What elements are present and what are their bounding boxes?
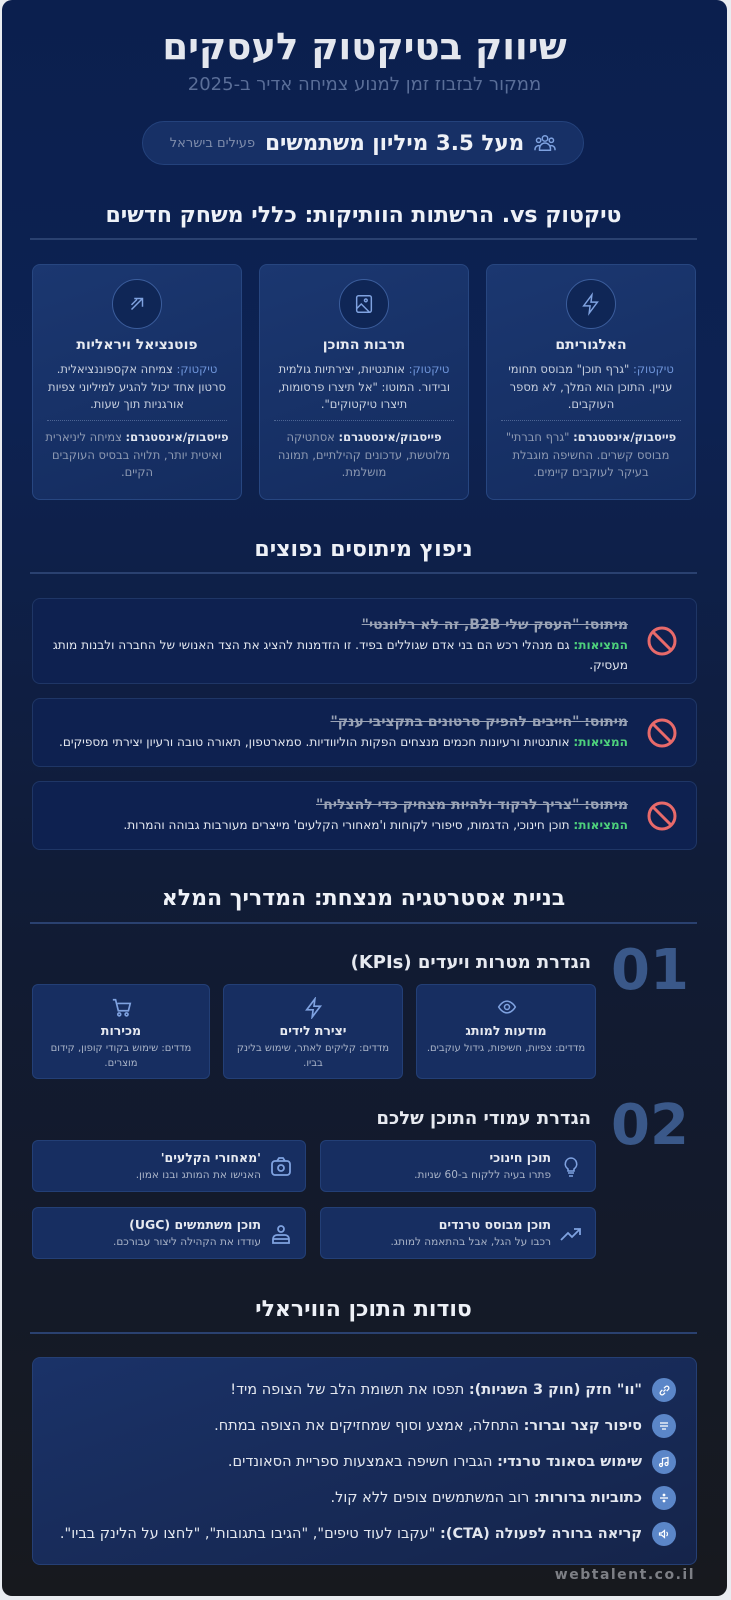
panel: algorithm xyxy=(486,264,696,500)
item: story xyxy=(214,1414,676,1438)
icon: no xyxy=(648,802,676,830)
panel: algorithm: טיקטוק: "גרף תוכן" מבוסס תחומי עניין. התוכן הוא המלך, לא מספר העוקבים. xyxy=(508,362,674,411)
item: story: סיפור קצר וברור: התחלה, אמצע וסוף שמחזיקים את הצופה במתח. xyxy=(214,1418,642,1434)
kpi: sales xyxy=(32,984,210,1079)
myth 3 xyxy=(32,781,697,850)
icon: no xyxy=(648,718,676,748)
item: sound xyxy=(228,1450,676,1474)
item: hook: "וו" חזק (חוק 3 השניות): תפסו את תשומת הלב של הצופה מיד! xyxy=(230,1382,642,1398)
pillar: trends: רכבו על הגל, אבל בהתאמה למותג. xyxy=(390,1236,551,1248)
panel: content culture xyxy=(259,264,469,500)
step 01 number: 01 xyxy=(611,938,689,1003)
title: שיווק בטיקטוק לעסקים xyxy=(162,25,567,68)
kpi: leads: מדדים: קליקים לאתר, שימוש בלינק בביו. xyxy=(237,1043,389,1069)
panel: content culture: טיקטוק: אותנטיות, יצירתיות גולמית ובידור. המוטו: "אל תיצרו פרסומות, תיצרו טיקטוקים". xyxy=(278,362,450,411)
step 02 heading: הגדרת עמודי התוכן שלכם xyxy=(377,1108,591,1129)
panel: viral potential xyxy=(32,264,242,500)
pillar: trends xyxy=(320,1207,596,1259)
pillar: UGC xyxy=(32,1207,306,1259)
icon: image xyxy=(339,279,389,329)
panel: content culture: תרבות התוכן xyxy=(323,337,405,353)
panel: algorithm: פייסבוק/אינסטגרם: "גרף חברתי" מבוסס קשרים. החשיפה מוגבלת בעיקר לעוקבים קיימים. xyxy=(506,430,676,479)
item: captions: כתוביות ברורות: רוב המשתמשים צופים ללא קול. xyxy=(330,1490,642,1506)
myth 1 xyxy=(32,598,697,684)
icon: bolt xyxy=(566,279,616,329)
panel: viral potential: טיקטוק: צמיחה אקספוננציאלית. סרטון אחד יכול להגיע למיליוני צפיות אורגניות תוך שעות. xyxy=(48,362,226,411)
pillar: behind the scenes: האנישו את המותג ובנו אמון. xyxy=(136,1169,261,1181)
heading: viral secrets: סודות התוכן הוויראלי xyxy=(255,1297,472,1322)
stat pill: מעל 3.5 מיליון משתמשים xyxy=(265,130,524,156)
subtitle: ממקור לבזבוז זמן למנוע צמיחה אדיר ב-2025 xyxy=(188,74,541,95)
panel: content culture: פייסבוק/אינסטגרם: אסתטיקה מלוטשת, עדכונים קהילתיים, תמונה מושלמת. xyxy=(278,430,450,479)
kpi: brand awareness: מודעות למותג xyxy=(465,1023,547,1038)
pillar: behind the scenes xyxy=(32,1140,306,1192)
step 01 heading: הגדרת מטרות ויעדים (KPIs) xyxy=(351,952,591,973)
pillar: UGC: עודדו את הקהילה ליצור עבורכם. xyxy=(113,1236,261,1248)
kpi: brand awareness: מדדים: צפיות, חשיפות, גידול עוקבים. xyxy=(427,1043,585,1054)
kpi: leads: יצירת לידים xyxy=(280,1023,346,1038)
heading: myths: ניפוץ מיתוסים נפוצים xyxy=(254,537,473,562)
icon: arrow xyxy=(112,279,162,329)
stat pill xyxy=(142,121,584,165)
myth 2 xyxy=(32,698,697,767)
item: captions xyxy=(330,1486,676,1510)
panel: algorithm: האלגוריתם xyxy=(555,337,627,353)
heading: tiktok vs: טיקטוק vs. הרשתות הוותיקות: כללי משחק חדשים xyxy=(105,203,622,228)
pillar: trends: תוכן מבוסס טרנדים xyxy=(439,1217,551,1232)
myth 2: מיתוס: "חייבים להפיק סרטונים בתקציבי ענק" xyxy=(331,714,628,730)
icon: no xyxy=(648,626,676,656)
step 02 number: 02 xyxy=(611,1093,689,1158)
myth 1: מיתוס: "העסק שלי B2B, זה לא רלוונטי" xyxy=(362,617,628,633)
item: CTA: קריאה ברורה לפעולה (CTA): "עקבו לעוד טיפים", "הגיבו בתגובות", "לחצו על הלינק בביו". xyxy=(60,1526,642,1542)
watermark: webtalent.co.il xyxy=(555,1567,695,1583)
kpi: leads xyxy=(223,984,403,1079)
myth 1: המציאות: גם מנהלי רכש הם בני אדם שגוללים בפיד. זו הזדמנות להציג את הצד האנושי של החברה ולבנות מותג מעסיק. xyxy=(53,638,628,672)
pillar: educational xyxy=(320,1140,596,1192)
kpi: sales: מדדים: שימוש בקודי קופון, קידום מוצרים. xyxy=(51,1043,191,1069)
panel: viral secrets list xyxy=(32,1357,697,1565)
heading: strategy: בניית אסטרטגיה מנצחת: המדריך המלא xyxy=(162,886,565,911)
item: sound: שימוש בסאונד טרנדי: הגבירו חשיפה באמצעות ספריית הסאונדים. xyxy=(228,1454,642,1470)
myth 2: המציאות: אותנטיות ורעיונות חכמים מנצחים הפקות הוליוודיות. סמארטפון, תאורה טובה ורעיון יצירתי מספיקים. xyxy=(59,735,628,749)
myth 3: המציאות: תוכן חינוכי, הדגמות, סיפורי לקוחות ו'מאחורי הקלעים' מייצרים מעורבות גבוהה והמרות. xyxy=(123,818,628,832)
kpi: sales: מכירות xyxy=(101,1023,141,1038)
item: hook xyxy=(230,1378,676,1402)
item: CTA xyxy=(60,1522,676,1546)
icon: users xyxy=(534,135,556,151)
pillar: educational: פתרו בעיה ללקוח ב-60 שניות. xyxy=(414,1169,551,1181)
pillar: behind the scenes: 'מאחורי הקלעים' xyxy=(161,1150,261,1165)
pillar: UGC: תוכן משתמשים (UGC) xyxy=(129,1217,261,1232)
stat pill: פעילים בישראל xyxy=(170,136,255,150)
myth 3: מיתוס: "צריך לרקוד ולהיות מצחיק כדי להצליח" xyxy=(316,797,628,813)
pillar: educational: תוכן חינוכי xyxy=(489,1150,551,1165)
panel: viral potential: פוטנציאל ויראליות xyxy=(76,337,198,353)
panel: viral potential: פייסבוק/אינסטגרם: צמיחה ליניארית ואיטית יותר, תלויה בבסיס העוקבים הקיים. xyxy=(45,430,229,479)
kpi: brand awareness xyxy=(416,984,596,1079)
